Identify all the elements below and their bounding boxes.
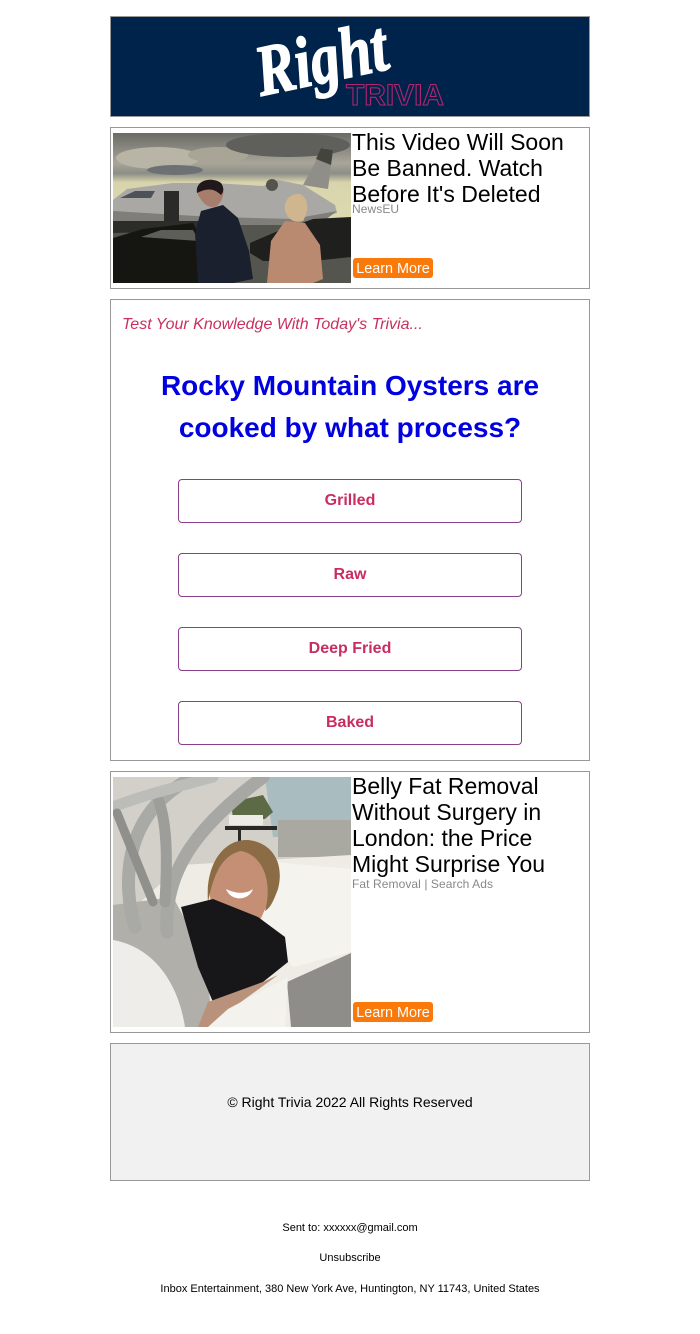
ad source: Fat Removal | Search Ads <box>352 877 493 891</box>
ad source: NewsEU <box>352 202 399 216</box>
sent to line: Sent to: xxxxxx@gmail.com <box>282 1222 418 1234</box>
question heading: Rocky Mountain Oysters are <box>161 370 539 401</box>
panel: copyright footer <box>110 1043 590 1181</box>
question heading: cooked by what process? <box>179 412 521 443</box>
ad headline: Before It's Deleted <box>352 181 540 207</box>
learn more button: Learn More <box>356 261 430 277</box>
learn more button: Learn More <box>356 1005 430 1021</box>
ad headline: Belly Fat Removal <box>352 773 539 799</box>
unsubscribe link: Unsubscribe <box>319 1252 381 1264</box>
answer: Raw <box>178 553 522 597</box>
intro line: Test Your Knowledge With Today's Trivia... <box>122 316 423 333</box>
ad headline: Without Surgery in <box>352 799 541 825</box>
logo word: TRIVIA: TRIVIA <box>346 79 444 112</box>
ad headline: London: the Price <box>352 825 532 851</box>
photo: couple walking to private jet <box>113 133 351 283</box>
answer: Baked <box>178 701 522 745</box>
ad headline: Be Banned. Watch <box>352 155 543 181</box>
panel: ad two <box>110 771 590 1033</box>
answer: Baked: Baked <box>326 714 374 731</box>
answer: Grilled: Grilled <box>325 492 375 509</box>
ad headline <box>352 129 564 207</box>
copyright text: © Right Trivia 2022 All Rights Reserved <box>227 1094 473 1110</box>
panel: ad one <box>110 127 590 289</box>
photo: smiling woman in treatment bed <box>113 777 351 1027</box>
answer: Raw: Raw <box>334 566 366 583</box>
company address: Inbox Entertainment, 380 New York Ave, Huntington, NY 11743, United States <box>160 1283 540 1295</box>
ad headline <box>352 773 545 877</box>
question heading <box>161 370 539 443</box>
ad headline: Might Surprise You <box>352 851 545 877</box>
ad headline: This Video Will Soon <box>352 129 564 155</box>
answer: Grilled <box>178 479 522 523</box>
header banner with logo <box>110 16 590 117</box>
panel: trivia question <box>110 299 590 761</box>
answer: Deep Fried: Deep Fried <box>309 640 391 657</box>
answer: Deep Fried <box>178 627 522 671</box>
logo <box>247 17 444 112</box>
